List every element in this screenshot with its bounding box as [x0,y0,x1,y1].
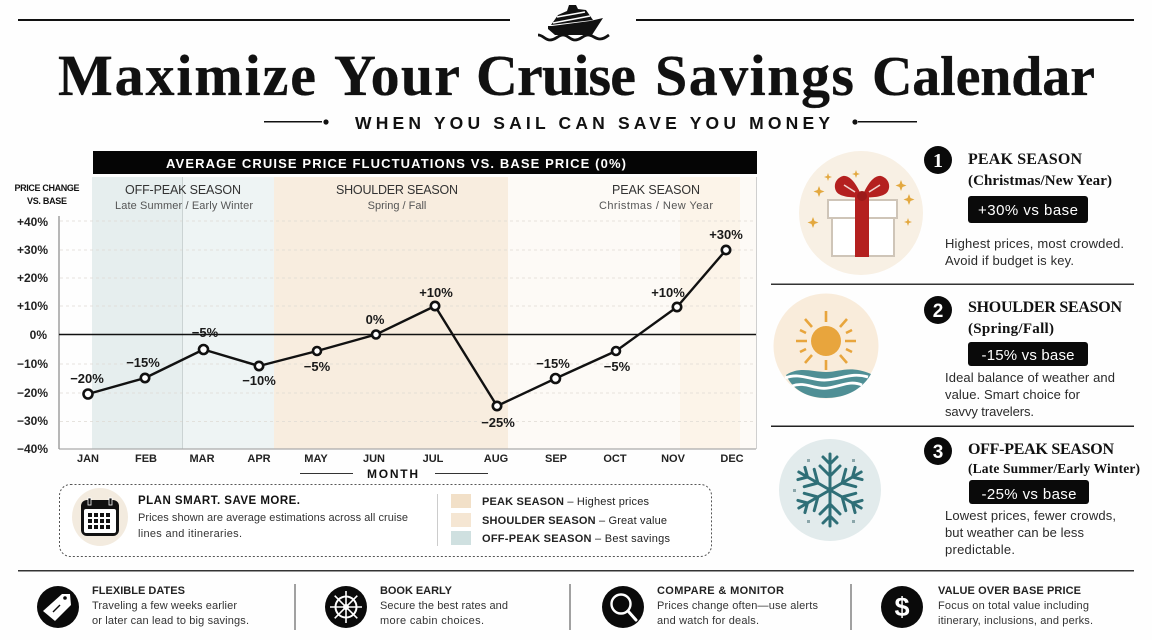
header rule right [636,19,1134,21]
pill: -25% vs base [982,486,1076,503]
month labels: MAY [304,453,328,465]
header rule left [18,19,510,21]
heading [968,151,1112,189]
month labels: APR [247,453,271,465]
data labels: −5% [192,325,219,340]
pill [969,480,1089,504]
month labels: JAN [77,453,99,465]
month labels: DEC [720,453,744,465]
description: savvy travelers. [945,404,1034,419]
y axis labels: −20% [17,386,48,400]
data labels: −20% [70,371,104,386]
panel: plan smart legend [60,484,712,556]
month labels [77,453,744,465]
season labels: Spring / Fall [368,200,426,212]
tip: book early [325,585,508,628]
y axis labels: −30% [17,414,48,428]
y axis labels: +20% [17,271,48,285]
panel: off-peak season [779,437,1140,557]
month labels: MAR [189,453,215,465]
season labels: SHOULDER SEASON [336,183,458,197]
tip: book early: Secure the best rates and [380,600,508,612]
month labels: FEB [135,453,157,465]
description: predictable. [945,542,1015,557]
data labels: −15% [536,356,570,371]
badge 2: 2 [933,301,943,322]
month labels: NOV [661,453,686,465]
legend: off-peak season: OFF-PEAK SEASON – Best savings [482,533,670,545]
icon: ship wheel [325,586,367,628]
pill [968,196,1088,223]
month labels: SEP [545,453,567,465]
subtitle: WHEN YOU SAIL CAN SAVE YOU MONEY [355,113,830,133]
pill [968,342,1088,366]
heading: PEAK SEASON [968,151,1082,168]
description [945,236,1124,268]
data line [88,250,726,406]
tip: compare and monitor: and watch for deals. [657,615,759,627]
badge 2 [924,296,952,324]
y axis labels: +10% [17,299,48,313]
description: but weather can be less [945,525,1084,540]
icon: dollar: $ [894,592,910,622]
badge 1 [924,146,952,174]
heading: (Late Summer/Early Winter) [968,461,1140,476]
month labels: JUL [423,453,444,465]
pill: +30% vs base [978,202,1078,219]
data labels [70,227,743,430]
tip: compare and monitor: Prices change often—use alerts [657,600,818,612]
title: Your [334,43,460,108]
data labels: 0% [366,312,385,327]
description: Highest prices, most crowded. [945,236,1124,251]
icon: sun over waves [774,294,878,398]
month labels: AUG [484,453,508,465]
y axis labels: +30% [17,243,48,257]
title: Maximize [58,43,316,108]
data labels: −15% [126,355,160,370]
description: Avoid if budget is key. [945,253,1074,268]
legend note [138,495,408,540]
data labels: +30% [709,227,743,242]
description: Ideal balance of weather and [945,370,1115,385]
legend note: lines and itineraries. [138,528,242,540]
tip: flexible dates: Traveling a few weeks earlier [92,600,237,612]
heading: SHOULDER SEASON [968,299,1122,316]
tip: flexible dates [37,585,249,628]
legend: shoulder season: SHOULDER SEASON – Great value [482,515,667,527]
heading: OFF-PEAK SEASON [968,441,1114,458]
x axis title: MONTH [367,467,418,481]
panel: peak season [799,146,1124,275]
season labels: Christmas / New Year [599,200,713,212]
heading: (Christmas/New Year) [968,173,1112,189]
title: Savings [655,43,854,108]
data labels: −5% [604,359,631,374]
y axis labels: +40% [17,215,48,229]
y axis labels: −40% [17,442,48,456]
tip: value over base price [881,585,1093,628]
heading [968,299,1122,337]
season labels: OFF-PEAK SEASON [125,183,241,197]
panel: shoulder season [774,294,1122,419]
description [945,508,1116,557]
title: Calendar [872,46,1095,108]
badge 3: 3 [933,442,943,463]
icon: gift [799,151,923,275]
data points [84,246,730,410]
tip: value over base price: itinerary, inclusions, and perks. [938,615,1093,627]
season bands [92,177,756,449]
season labels: PEAK SEASON [612,183,700,197]
chart title bar: AVERAGE CRUISE PRICE FLUCTUATIONS VS. BASE PRICE (0%) [166,156,626,171]
data labels: −5% [304,359,331,374]
y axis title: VS. BASE [27,196,67,206]
tip: compare and monitor: COMPARE & MONITOR [657,585,784,597]
data labels: +10% [651,285,685,300]
season labels [115,183,713,212]
badge 1: 1 [933,150,943,172]
month labels: JUN [363,453,385,465]
tip: value over base price: Focus on total value including [938,600,1089,612]
tip: flexible dates: FLEXIBLE DATES [92,585,185,597]
description: Lowest prices, fewer crowds, [945,508,1116,523]
tip: compare and monitor [602,585,818,628]
tip: book early: BOOK EARLY [380,585,453,597]
icon: snowflake [779,439,881,541]
chart title bar [93,151,757,174]
icon: calendar [72,488,128,546]
description: value. Smart choice for [945,387,1081,402]
y axis labels: −10% [17,357,48,371]
icon: dollar [881,586,923,628]
legend: peak season: PEAK SEASON – Highest prices [482,496,650,508]
tip: flexible dates: or later can lead to big savings. [92,615,249,627]
y axis title: PRICE CHANGE [14,183,80,193]
icon: price tag [37,586,79,628]
data labels: +10% [419,285,453,300]
y axis title [14,183,80,206]
legend note: Prices shown are average estimations across all cruise [138,512,408,524]
tip: value over base price: VALUE OVER BASE PRICE [938,585,1081,597]
data labels: −10% [242,373,276,388]
legend note: PLAN SMART. SAVE MORE. [138,495,300,507]
title: Cruise [476,43,636,108]
heading [968,441,1140,476]
heading: (Spring/Fall) [968,321,1054,337]
season labels: Late Summer / Early Winter [115,200,253,212]
icon: cruise ship [538,5,609,40]
tip: book early: more cabin choices. [380,615,484,627]
badge 3 [924,437,952,465]
month labels: OCT [603,453,627,465]
y axis labels [17,215,48,456]
icon: magnifier [602,586,644,628]
title [58,43,1095,108]
pill: -15% vs base [982,347,1074,364]
line chart [14,177,756,481]
description [945,370,1115,419]
data labels: −25% [481,415,515,430]
y axis labels: 0% [30,328,47,342]
